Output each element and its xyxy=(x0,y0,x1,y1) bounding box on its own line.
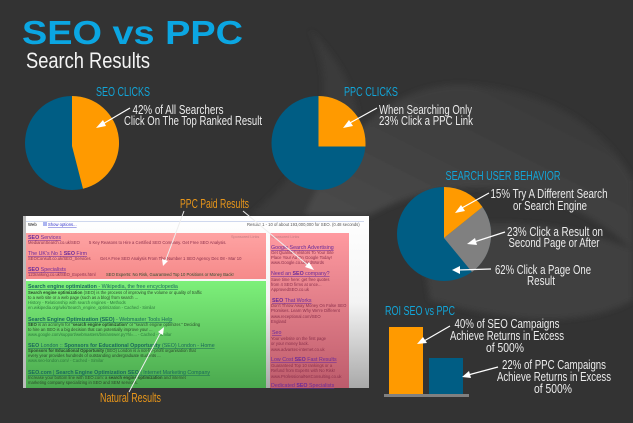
callout: PPC clicks: When Searching Only xyxy=(379,103,473,117)
arrow: 23 percent xyxy=(467,232,505,245)
panel: paid results side: Google Search Advertising xyxy=(271,245,334,251)
callout: 62 percent xyxy=(495,263,591,288)
panel: paid results side: Low Cost SEO Fast Results xyxy=(271,357,337,363)
arrow: PPC clicks xyxy=(343,108,377,128)
panel: natural results: marketing company specializing in SEO and SEM services. xyxy=(28,380,138,385)
panel: paid results top xyxy=(26,233,266,279)
panel: paid results side: www.ProfessionalNetConsulting.co.uk xyxy=(271,374,342,379)
callout: 15 percent: or Search Engine xyxy=(513,199,587,213)
panel: paid results side: Guaranteed Top 10 rankings or a xyxy=(271,363,333,368)
panel: paid results side: www.Google.co.uk/AdWords xyxy=(271,260,324,265)
arrow: SEO clicks xyxy=(96,108,130,128)
arrow: PPC bar xyxy=(462,367,498,378)
panel: paid results side: www.receptional.com/SEO xyxy=(271,314,321,319)
arrow: natural results xyxy=(129,327,164,392)
panel: paid results side: or your money back. xyxy=(271,341,309,346)
arrow: 15 percent xyxy=(455,193,489,213)
panel: search results screenshot: Web xyxy=(28,222,37,227)
panel: paid results top: SEO Specialists xyxy=(28,267,66,273)
callout: PPC bar xyxy=(497,358,611,396)
arrow: SEO bar xyxy=(417,326,450,344)
panel: natural results: www.google.com/support/webmasters/bin/answer.py?hl=... - Cached - Similar xyxy=(28,332,172,337)
arrow: 62 percent xyxy=(452,266,491,274)
panel: paid results side: Promises. Learn Why We're Different xyxy=(271,308,341,313)
panel: natural results: Search engine optimization - Wikipedia, the free encyclopedia xyxy=(28,284,178,290)
callout: SEO clicks: 42% of All Searchers xyxy=(132,103,224,117)
panel: paid results top: MediarunSearch.co.uk/SEO xyxy=(28,240,81,245)
callout: 23 percent: Second Page or After xyxy=(508,236,600,250)
subtitle: Search Results xyxy=(26,48,150,73)
bar chart: ROI xyxy=(384,327,469,397)
panel: paid results side: Dedicated SEO Specialists xyxy=(271,383,335,389)
panel: search user behavior xyxy=(397,168,608,288)
panel: paid results side: Get Qualified Visitors To Your Site xyxy=(271,250,334,255)
panel: paid results side: Don't Throw Away Money On False SEO xyxy=(271,303,347,308)
panel: paid results side xyxy=(270,233,349,389)
panel: paid results top: SEOConsult.co.uk/SEO_Services xyxy=(28,256,91,261)
heading: SEO clicks: SEO CLICKS xyxy=(96,84,150,99)
panel: paid results side: ApprovedSEO.co.uk xyxy=(271,287,310,292)
panel: natural results: SEO is an acronym for "search engine optimization" or "search engine optimizer." Deciding xyxy=(28,322,201,327)
panel: natural results: Sponsors for Educational Opportunity (SEO) London is a not-for-profit organisation that xyxy=(28,348,197,353)
callout: SEO bar xyxy=(450,317,564,355)
panel: paid results top: Sponsored Links xyxy=(231,235,259,239)
panel: natural results: SEO.com | Search Engine Optimization SEO | Internet Marketing Company xyxy=(28,370,210,376)
panel: paid results side: from 4 SEO firms at once... xyxy=(271,282,322,287)
callout: SEO bar: of 500% xyxy=(486,341,524,355)
panel: paid results top: 5 Key Reasons to Hire a Certified SEO Company. Get Free SEO Analysis. xyxy=(89,240,226,245)
callout: 15 percent xyxy=(490,187,608,213)
panel: PPC clicks xyxy=(272,84,474,190)
panel: paid results top: SEO Services xyxy=(28,235,61,241)
panel: paid results side: Place Your Ad On Google Today! xyxy=(271,255,332,260)
panel: natural results: to hire an SEO is a big decision that can potentially improve your ... xyxy=(28,327,153,332)
panel: paid results side: SEO That Works xyxy=(272,298,312,304)
panel: natural results: Search engine optimization (SEO) is the process of improving the volume or quality of traffic xyxy=(28,290,202,295)
callout: 62 percent: Result xyxy=(527,274,555,288)
panel: natural results: Search Engine Optimization (SEO) - Webmaster Tools Help xyxy=(28,317,172,323)
title: SEO vs PPC xyxy=(22,14,243,51)
panel: search results screenshot: Results 1 - 10 of about 193,000,000 for SEO. (0.48 seconds) xyxy=(247,222,360,227)
pie chart: PPC clicks xyxy=(272,96,366,190)
heading: search user behavior: SEARCH USER BEHAVIOR xyxy=(446,168,560,183)
panel: paid results side: Seo xyxy=(272,330,281,336)
callout: SEO clicks: Click On The Top Ranked Result xyxy=(124,114,262,128)
panel: paid results top: SEO Experts: No Risk, Guaranteed Top 10 Positions or Money Back! xyxy=(106,272,234,277)
panel: paid results side: England xyxy=(271,319,287,324)
panel: ROI SEO vs PPC xyxy=(384,303,611,397)
callout: PPC bar: 22% of PPC Campaigns xyxy=(502,358,606,372)
label: natural results: Natural Results xyxy=(100,390,161,405)
panel: paid results side: www.advantec-internet.co.uk xyxy=(271,347,325,352)
panel: paid results side: Refund from Experts with No Risk! xyxy=(271,368,335,373)
panel: search results screenshot xyxy=(23,216,369,389)
callout: SEO bar: Achieve Returns in Excess xyxy=(450,329,564,343)
heading: PPC clicks: PPC CLICKS xyxy=(344,84,398,99)
panel: paid results top: Get A Free SEO Analysis From The Number 1 SEO Agency Dec 08 - Mar 10 xyxy=(100,256,242,261)
callout: 62 percent: 62% Click a Page One xyxy=(495,263,591,277)
panel: natural results: Increase your bottom line with SEO.com: a search engine optimization and internet xyxy=(28,375,187,380)
callout: PPC bar: of 500% xyxy=(534,382,572,396)
callout: 23 percent: 23% Click a Result on xyxy=(507,225,603,239)
panel: SEO clicks xyxy=(25,84,262,190)
pie chart: SEO clicks xyxy=(25,96,119,190)
panel: natural results xyxy=(26,281,266,388)
callout: PPC clicks xyxy=(379,103,474,128)
callout: SEO bar: 40% of SEO Campaigns xyxy=(454,317,560,331)
label: PPC paid results: PPC Paid Results xyxy=(180,196,249,211)
panel: paid results side: Sponsored Links xyxy=(271,235,299,239)
callout: PPC clicks: 23% Click a PPC Link xyxy=(379,114,474,128)
panel: paid results top: 123ranking.co.uk/SEO_Experts.html xyxy=(28,272,96,277)
callout: SEO clicks xyxy=(124,103,262,128)
panel: paid results top: The UK's No 1 SEO Firm xyxy=(28,251,88,257)
panel: paid results side: Save time here: get free quotes xyxy=(271,277,329,282)
panel: natural results: every year provides hundreds of outstanding undergraduate students ... xyxy=(28,353,161,358)
panel: search results screenshot: Show options... xyxy=(48,222,77,227)
heading: ROI: ROI SEO vs PPC xyxy=(385,303,455,318)
arrow: paid results top xyxy=(162,211,184,266)
panel: natural results: History - Relationship with search engines - Methods xyxy=(28,300,126,305)
panel: natural results: www.seo-london.com/ - Cached - Similar xyxy=(28,358,104,363)
panel: paid results side: Need an SEO company? xyxy=(271,271,330,277)
panel: paid results side: Your website on the first page xyxy=(271,336,327,341)
pie chart: search user behavior xyxy=(397,187,491,281)
callout: 23 percent xyxy=(507,225,603,250)
panel: natural results: en.wikipedia.org/wiki/Search_engine_optimization - Cached - Similar xyxy=(28,305,156,310)
arrow: paid results side xyxy=(243,211,314,270)
panel: natural results: SEO London :: Sponsors for Educational Opportunity (SEO) London - Home xyxy=(28,343,215,349)
panel: natural results: to a web site or a web page (such as a blog) from search ... xyxy=(28,295,138,300)
